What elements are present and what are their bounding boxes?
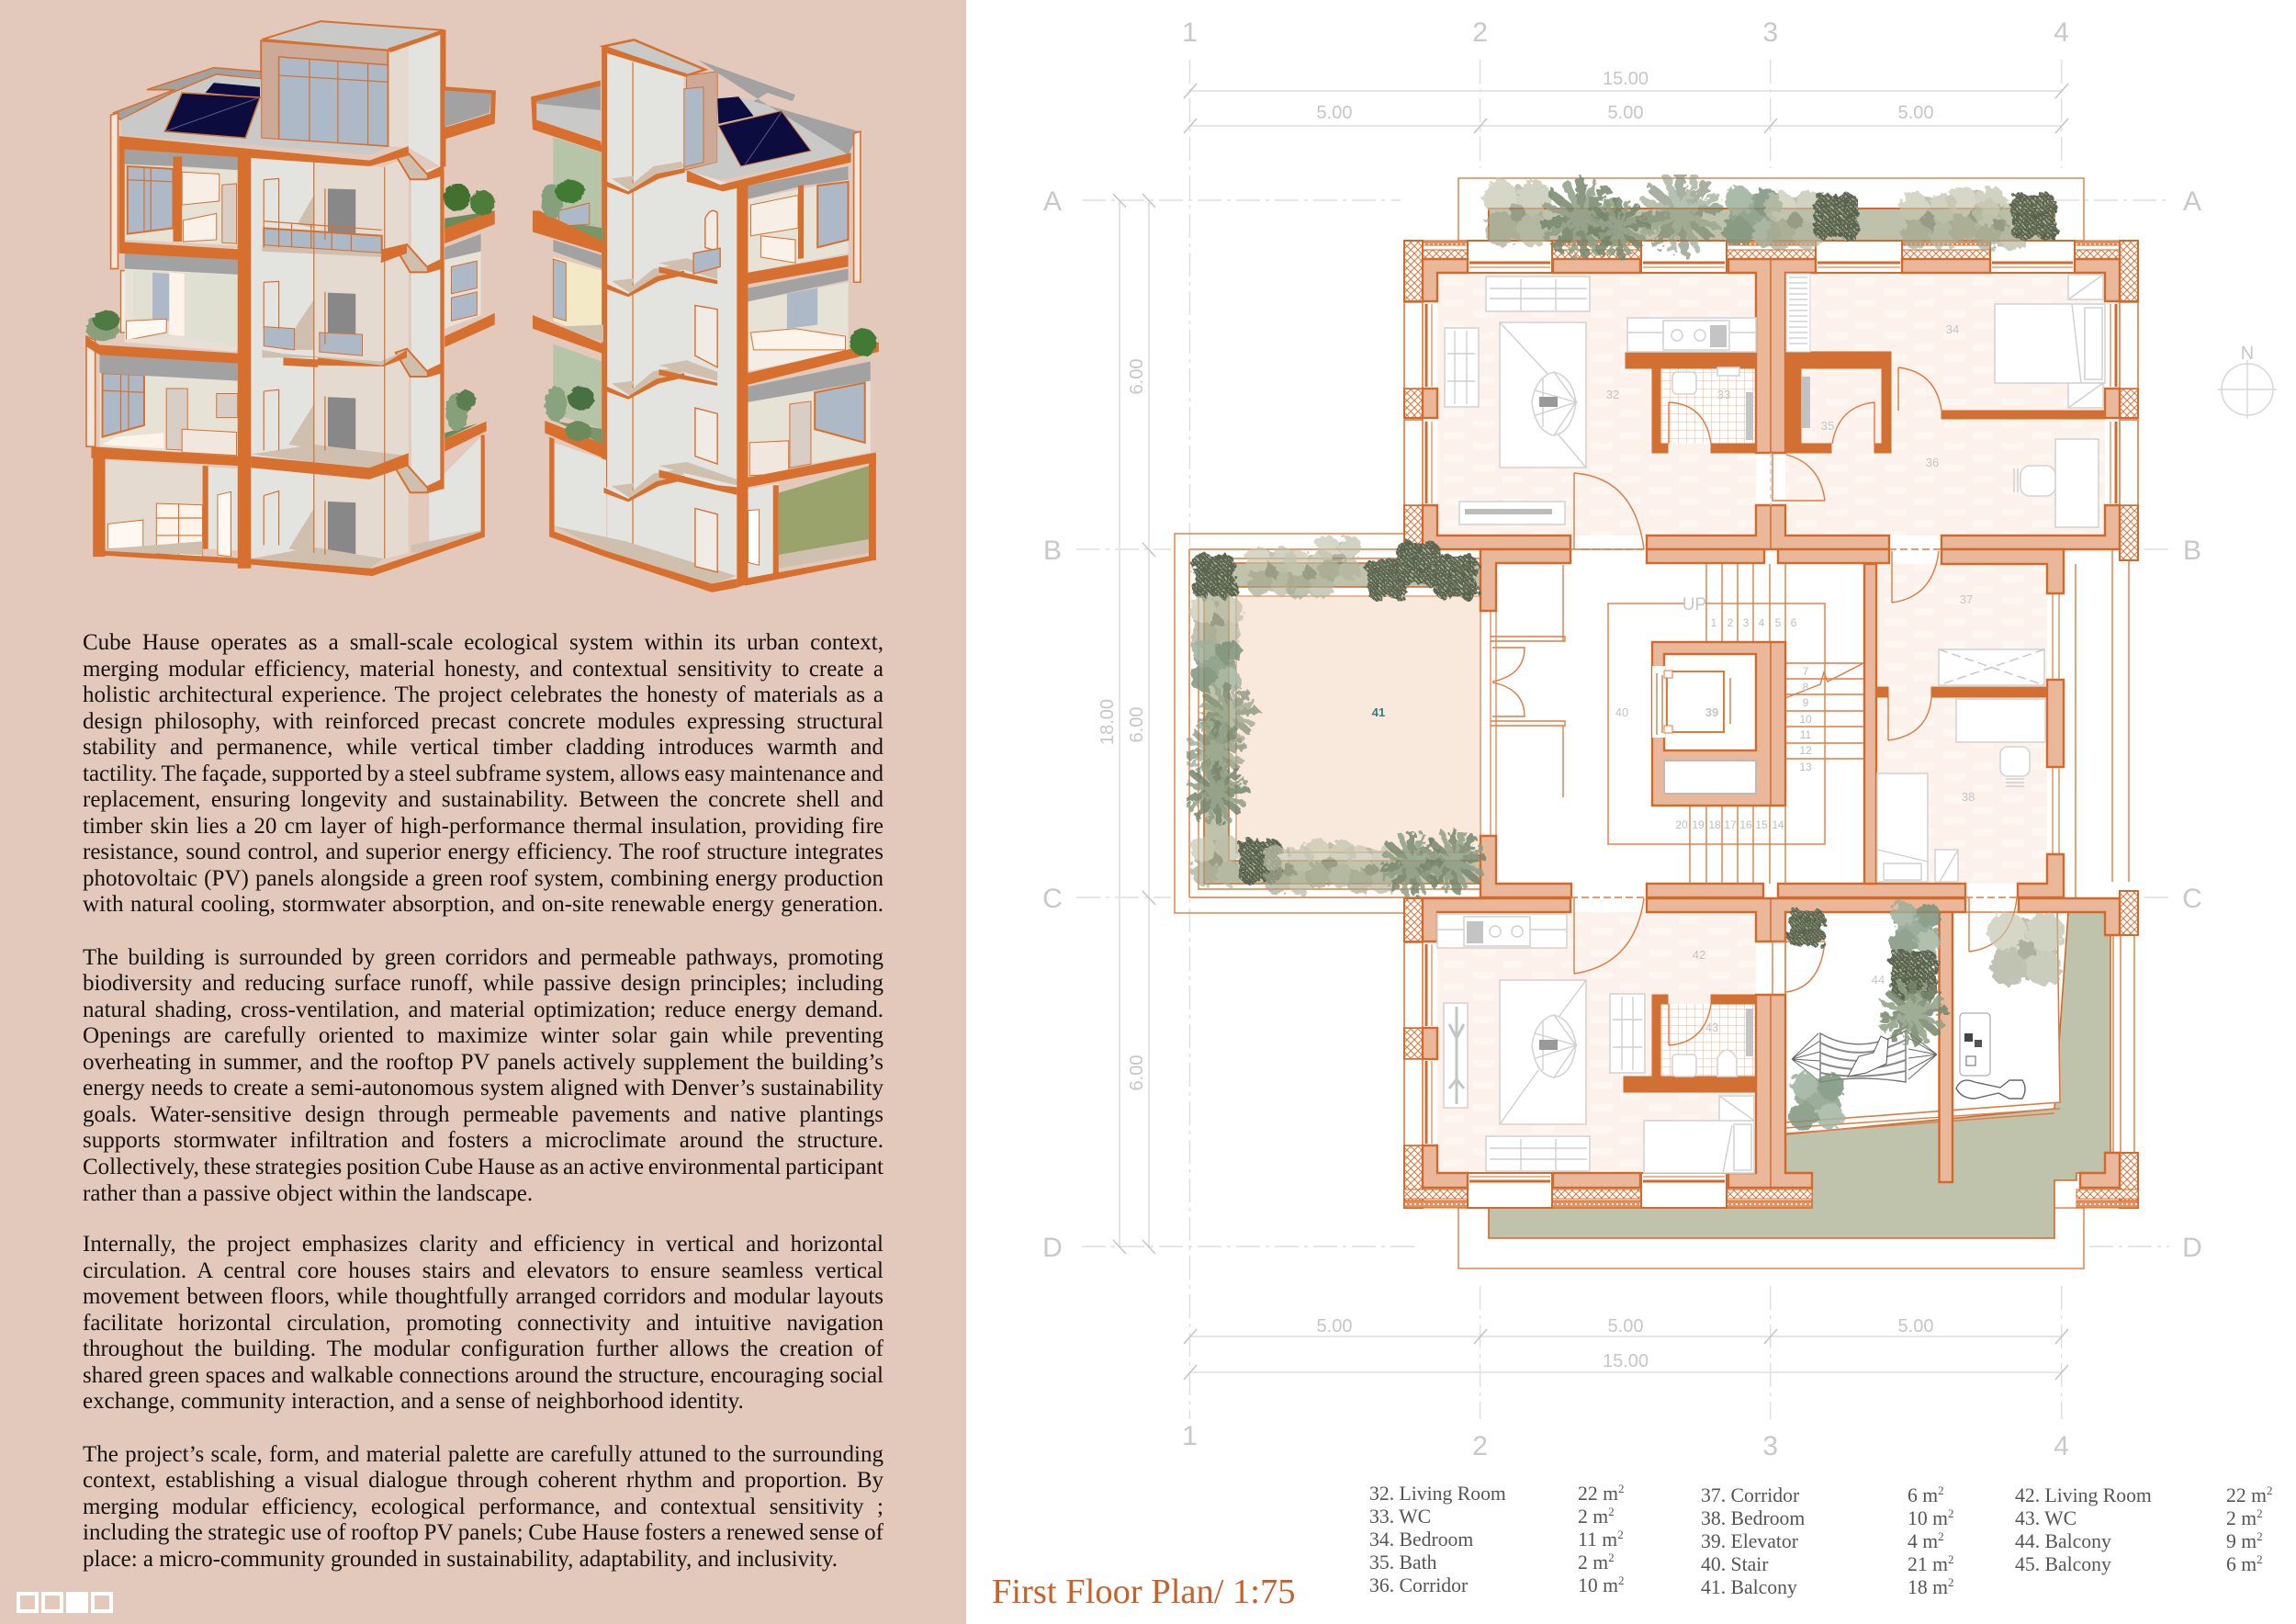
stair landings <box>604 162 737 502</box>
tower and roof <box>684 60 860 180</box>
plan: room numbers: 39 <box>1705 705 1718 719</box>
plan: room numbers: 33 <box>1717 388 1730 401</box>
solar panels <box>164 83 260 138</box>
plan: room numbers: 34 <box>1946 322 1959 336</box>
grid labels: C <box>2182 884 2202 914</box>
legend: rooms 32-36 areas: 22 m2 <box>1578 1482 1624 1505</box>
plan: vertical core with stairs and elevator: 1 <box>1711 616 1717 629</box>
plan: vertical core with stairs and elevator: 7 <box>1803 665 1809 678</box>
stairs zigzag <box>396 152 445 492</box>
legend: rooms 42-45 names: 45. Balcony <box>2015 1553 2111 1575</box>
legend: rooms 37-41 areas <box>1908 1483 1954 1598</box>
plan: room numbers: 41 <box>1372 705 1385 719</box>
legend: rooms 32-36 areas: 10 m2 <box>1578 1573 1624 1596</box>
legend: rooms 32-36 areas <box>1578 1482 1624 1596</box>
legend: rooms 42-45 areas: 2 m2 <box>2226 1506 2263 1529</box>
legend: rooms 42-45 names: 42. Living Room <box>2015 1484 2152 1506</box>
plan: vertical core with stairs and elevator: 12 <box>1799 744 1812 757</box>
plan: vertical core with stairs and elevator: 11 <box>1800 728 1812 741</box>
dimension values: 18.00 <box>1097 699 1118 745</box>
legend: rooms 37-41 areas: 6 m2 <box>1908 1483 1944 1506</box>
text: paragraph 2: Openings are carefully oriented to maximize winter solar gain while preventing <box>83 1023 884 1048</box>
legend: rooms 37-41 names <box>1701 1484 1805 1598</box>
text: paragraph 4: merging modular efficiency, ecological performance, and contextual sensitivity ; <box>83 1494 884 1519</box>
text: paragraph 1: tactility. The façade, supported by a steel subframe system, allows easy maintenance and <box>83 761 884 786</box>
plan: vertical core with stairs and elevator: 13 <box>1799 761 1812 773</box>
windows <box>1404 241 2138 1208</box>
plan: room numbers: 42 <box>1693 948 1705 962</box>
tower <box>261 21 445 169</box>
plan: room numbers: 40 <box>1615 705 1628 719</box>
plants on right building <box>541 180 876 441</box>
closet and west entry doors <box>1491 565 1565 797</box>
text: paragraph 3: circulation. A central core houses stairs and elevators to ensure seamless vertical <box>83 1258 884 1283</box>
text: paragraph 2: The building is surrounded by green corridors and permeable pathways, promoting <box>83 945 884 970</box>
legend: rooms 32-36 names: 34. Bedroom <box>1369 1528 1473 1551</box>
text: paragraph 2: natural shading, cross-ventilation, and material optimization; reduce energy demand. <box>83 998 884 1022</box>
plan: room numbers: 43 <box>1705 1021 1718 1034</box>
text: paragraph 4 <box>83 1442 884 1572</box>
furniture: north living room <box>1445 276 1590 524</box>
text: paragraph 1: merging modular efficiency, material honesty, and contextual sensitivity to create a <box>83 657 884 682</box>
plan: room numbers: 37 <box>1960 592 1973 606</box>
grid labels: 1 <box>1182 1421 1198 1451</box>
plan: vertical core with stairs and elevator: 14 <box>1772 818 1784 831</box>
legend: rooms 42-45 areas: 9 m2 <box>2226 1529 2263 1552</box>
legend: rooms 37-41 names: 38. Bedroom <box>1701 1507 1805 1529</box>
plan: furniture <box>1437 274 2105 1173</box>
grid labels: B <box>1043 536 1062 566</box>
plan: room numbers <box>1372 322 2021 1034</box>
text: paragraph 4: context, establishing a visual dialogue through coherent rhythm and proportion. By <box>83 1468 884 1493</box>
plan: vertical core with stairs and elevator: 19 <box>1692 818 1705 831</box>
legend: rooms 42-45 names <box>2015 1484 2152 1575</box>
grid labels: 4 <box>2054 1431 2069 1461</box>
furniture: east bedroom <box>1877 649 2045 882</box>
plan: room numbers: 44 <box>1872 973 1885 987</box>
plan: room numbers: 32 <box>1606 388 1619 401</box>
furniture: outdoor table and person <box>1956 1013 2025 1099</box>
grid labels: D <box>2182 1233 2202 1263</box>
dimension values: 6.00 <box>1127 359 1147 394</box>
legend: rooms 32-36 names <box>1369 1483 1506 1596</box>
grid labels: D <box>1042 1233 1063 1263</box>
dimension values: 6.00 <box>1127 707 1147 742</box>
furniture: hammock <box>1792 1031 1937 1082</box>
icon: north compass: N <box>2241 344 2254 364</box>
text: paragraph 2: Collectively, these strategies position Cube Hause as an active environmental participant <box>83 1155 884 1179</box>
text: paragraph 3: movement between floors, while thoughtfully arranged corridors and modular layouts <box>83 1284 884 1309</box>
right rooms <box>687 131 879 588</box>
grid labels: 3 <box>1762 1431 1778 1461</box>
roof with parapet <box>114 68 388 154</box>
dimension values: 15.00 <box>1603 1351 1649 1371</box>
plan: doors <box>1570 367 2018 1045</box>
legend: rooms 42-45 areas <box>2226 1483 2272 1575</box>
room levels <box>85 113 485 576</box>
text: paragraph 4: place: a micro-community grounded in sustainability, adaptability, and inclusivity. <box>83 1547 838 1572</box>
plan: room floors <box>1437 273 2105 1173</box>
text: paragraph 2: supports stormwater infiltration and fosters a microclimate around the structure. <box>83 1128 884 1153</box>
grid labels: 3 <box>1762 17 1778 48</box>
text: paragraph 3: throughout the building. The modular configuration further allows the creation of <box>83 1336 884 1361</box>
dimension values: 5.00 <box>1317 103 1352 123</box>
legend: rooms 32-36 names: 36. Corridor <box>1369 1574 1468 1596</box>
grid labels <box>1042 17 2202 1461</box>
text: paragraph 3: exchange, community interaction, and a sense of neighborhood identity. <box>83 1389 744 1414</box>
axonometric: right building section <box>531 39 879 592</box>
plan: vertical core with stairs and elevator: 3 <box>1743 616 1750 629</box>
grid axes and dimension lines <box>1042 17 2202 1461</box>
arched doors <box>693 210 720 572</box>
legend: rooms 37-41 areas: 21 m2 <box>1908 1552 1954 1575</box>
legend: rooms 42-45 areas: 22 m2 <box>2226 1483 2272 1506</box>
dimension values: 5.00 <box>1898 1316 1933 1336</box>
plan: vertical core with stairs and elevator: 8 <box>1803 681 1809 694</box>
plants: south balconies <box>1788 901 2065 1130</box>
text: paragraph 1 <box>83 630 884 917</box>
text: paragraph 4: including the strategic use of rooftop PV panels; Cube Hause fosters a renewed sense of <box>83 1520 884 1545</box>
grid labels: C <box>1042 884 1063 914</box>
dimension values: 6.00 <box>1127 1055 1147 1090</box>
legend: rooms 32-36 areas: 11 m2 <box>1578 1528 1624 1551</box>
plan: room numbers: 45 <box>2009 973 2021 987</box>
plan: room numbers: 35 <box>1821 419 1834 433</box>
legend: rooms 32-36 areas: 2 m2 <box>1578 1505 1615 1528</box>
text: paragraph 1: holistic architectural experience. The project celebrates the honesty of materials as a <box>83 682 884 707</box>
legend: rooms 32-36 areas: 2 m2 <box>1578 1551 1615 1573</box>
plan: vertical core with stairs and elevator: 17 <box>1724 818 1737 831</box>
legend: rooms 32-36 names: 33. WC <box>1369 1506 1431 1528</box>
dimension values: 5.00 <box>1898 103 1933 123</box>
legend: rooms 37-41 names: 37. Corridor <box>1701 1484 1799 1506</box>
panel: project description and axonometric sections <box>0 0 966 1624</box>
plan: vertical core with stairs and elevator: 20 <box>1675 818 1688 831</box>
text: paragraph 1: resistance, sound control, and superior energy efficiency. The roof structure integrates <box>83 840 884 864</box>
core: elevator doors, stairs and railings <box>251 163 409 569</box>
slabs and columns <box>687 152 851 191</box>
legend: rooms 32-36 names: 35. Bath <box>1369 1551 1436 1573</box>
panel: first floor plan drawing <box>1042 17 2277 1461</box>
right balcony top <box>445 86 496 140</box>
elevator cab <box>1657 671 1730 735</box>
axonometric section drawings <box>85 20 879 592</box>
plan: vertical core with stairs and elevator: 16 <box>1739 818 1752 831</box>
left wing rooms <box>531 81 737 592</box>
legend: rooms 37-41 areas: 10 m2 <box>1908 1506 1954 1529</box>
legend: rooms 42-45 names: 44. Balcony <box>2015 1530 2111 1552</box>
legend: rooms 37-41 names: 40. Stair <box>1701 1553 1769 1575</box>
legend: rooms 37-41 areas: 4 m2 <box>1908 1529 1944 1552</box>
grid lines <box>1190 60 2062 1419</box>
solar panels <box>717 96 811 166</box>
plan: vertical core with stairs and elevator: 9 <box>1803 696 1809 709</box>
text: paragraph 2: rather than a passive object within the landscape. <box>83 1181 533 1206</box>
grid labels: A <box>2183 186 2201 217</box>
dimension values: 5.00 <box>1608 103 1643 123</box>
furniture: north bedroom and bath <box>1672 274 2105 527</box>
plan: vertical core with stairs and elevator: 4 <box>1759 616 1765 629</box>
text: paragraph 2 <box>83 945 884 1206</box>
grid labels: 2 <box>1472 17 1488 48</box>
plan: vertical core with stairs and elevator: 6 <box>1791 616 1797 629</box>
text: paragraph 3: facilitate horizontal circulation, promoting connectivity and intuitive navigation <box>83 1311 884 1336</box>
plants on left building <box>85 184 495 431</box>
icon: north compass <box>2218 344 2277 419</box>
legend: rooms 37-41 names: 41. Balcony <box>1701 1576 1797 1598</box>
text: paragraph 4: The project’s scale, form, and material palette are carefully attuned to the surrounding <box>83 1442 884 1467</box>
legend: rooms 32-36 names: 32. Living Room <box>1369 1483 1506 1505</box>
legend: rooms 37-41 names: 39. Elevator <box>1701 1530 1798 1552</box>
grid labels: B <box>2183 536 2201 566</box>
plan: room numbers: 38 <box>1962 790 1975 804</box>
text: paragraph 1: photovoltaic (PV) panels alongside a green roof system, combining energy production <box>83 866 884 891</box>
plan: vertical core with stairs and elevator: 5 <box>1775 616 1782 629</box>
text: paragraph 2: biodiversity and reducing surface runoff, while passive design principles; including <box>83 971 884 996</box>
text: paragraph 1: design philosophy, with reinforced precast concrete modules expressing structural <box>83 709 884 734</box>
dimension values <box>1097 69 1933 1371</box>
text: paragraph 1: timber skin lies a 20 cm layer of high-performance thermal insulation, providing fire <box>83 814 884 839</box>
text: paragraph 2: energy needs to create a semi-autonomous system aligned with Denver’s sustainability <box>83 1076 884 1100</box>
plan: plants <box>1187 175 2065 1130</box>
grid labels: 4 <box>2054 17 2069 48</box>
text: paragraph 3 <box>83 1232 884 1414</box>
text: paragraph 2: goals. Water-sensitive design through permeable pavements and native plantings <box>83 1102 884 1127</box>
dimension values: 15.00 <box>1603 69 1649 89</box>
plan: vertical core with stairs and elevator: 10 <box>1799 713 1812 726</box>
legend: rooms 42-45 names: 43. WC <box>2015 1507 2077 1529</box>
dimension values: 5.00 <box>1317 1316 1352 1336</box>
plan: facade hatching and windows <box>1404 241 2138 1208</box>
dimension values: 5.00 <box>1608 1316 1643 1336</box>
plants: west terrace <box>1187 536 1482 895</box>
plan: room numbers: 36 <box>1926 456 1939 469</box>
furniture: kitchen <box>1627 318 1756 352</box>
grid labels: 2 <box>1472 1431 1488 1461</box>
furniture: south living room <box>1437 914 1754 1173</box>
text: paragraph 3: Internally, the project emphasizes clarity and efficiency in vertical and horizontal <box>83 1232 884 1257</box>
legend: rooms 37-41 areas: 18 m2 <box>1908 1575 1954 1598</box>
plan: balcony outlines and planters <box>1175 178 2134 1269</box>
side planters and rooms <box>445 210 495 452</box>
plants: north planter <box>1482 175 2057 255</box>
text: paragraph 1: with natural cooling, stormwater absorption, and on-site renewable energy generation. <box>83 892 884 917</box>
grid labels: 1 <box>1182 17 1198 48</box>
plan: vertical core with stairs and elevator: 18 <box>1708 818 1721 831</box>
plan: vertical core with stairs and elevator: UP <box>1683 595 1706 615</box>
plan: concrete walls <box>1423 259 2120 1188</box>
legend: rooms 42-45 areas: 6 m2 <box>2226 1552 2263 1575</box>
text: paragraph 1: replacement, ensuring longevity and sustainability. Between the concrete shell and <box>83 787 884 812</box>
text: paragraph 3: shared green spaces and walkable connections around the structure, encouraging social <box>83 1363 884 1388</box>
plan: dark partition walls <box>1624 352 2105 1092</box>
title: drawing name and scale: First Floor Plan/ 1:75 <box>992 1573 1296 1611</box>
plan: vertical core with stairs and elevator: 2 <box>1728 616 1734 629</box>
text: paragraph 2: overheating in summer, and the rooftop PV panels actively supplement the building’s <box>83 1050 884 1075</box>
grid labels: A <box>1043 186 1062 217</box>
logo: four squares <box>17 1592 113 1613</box>
plan: vertical core with stairs and elevator <box>1491 564 1863 884</box>
plan: vertical core with stairs and elevator: 15 <box>1755 818 1768 831</box>
text: paragraph 1: stability and permanence, while vertical timber cladding introduces warmth and <box>83 735 884 760</box>
slabs and columns <box>119 136 409 166</box>
text: paragraph 1: Cube Hause operates as a small-scale ecological system within its urban context, <box>83 630 884 655</box>
axonometric: left building section <box>85 21 496 576</box>
